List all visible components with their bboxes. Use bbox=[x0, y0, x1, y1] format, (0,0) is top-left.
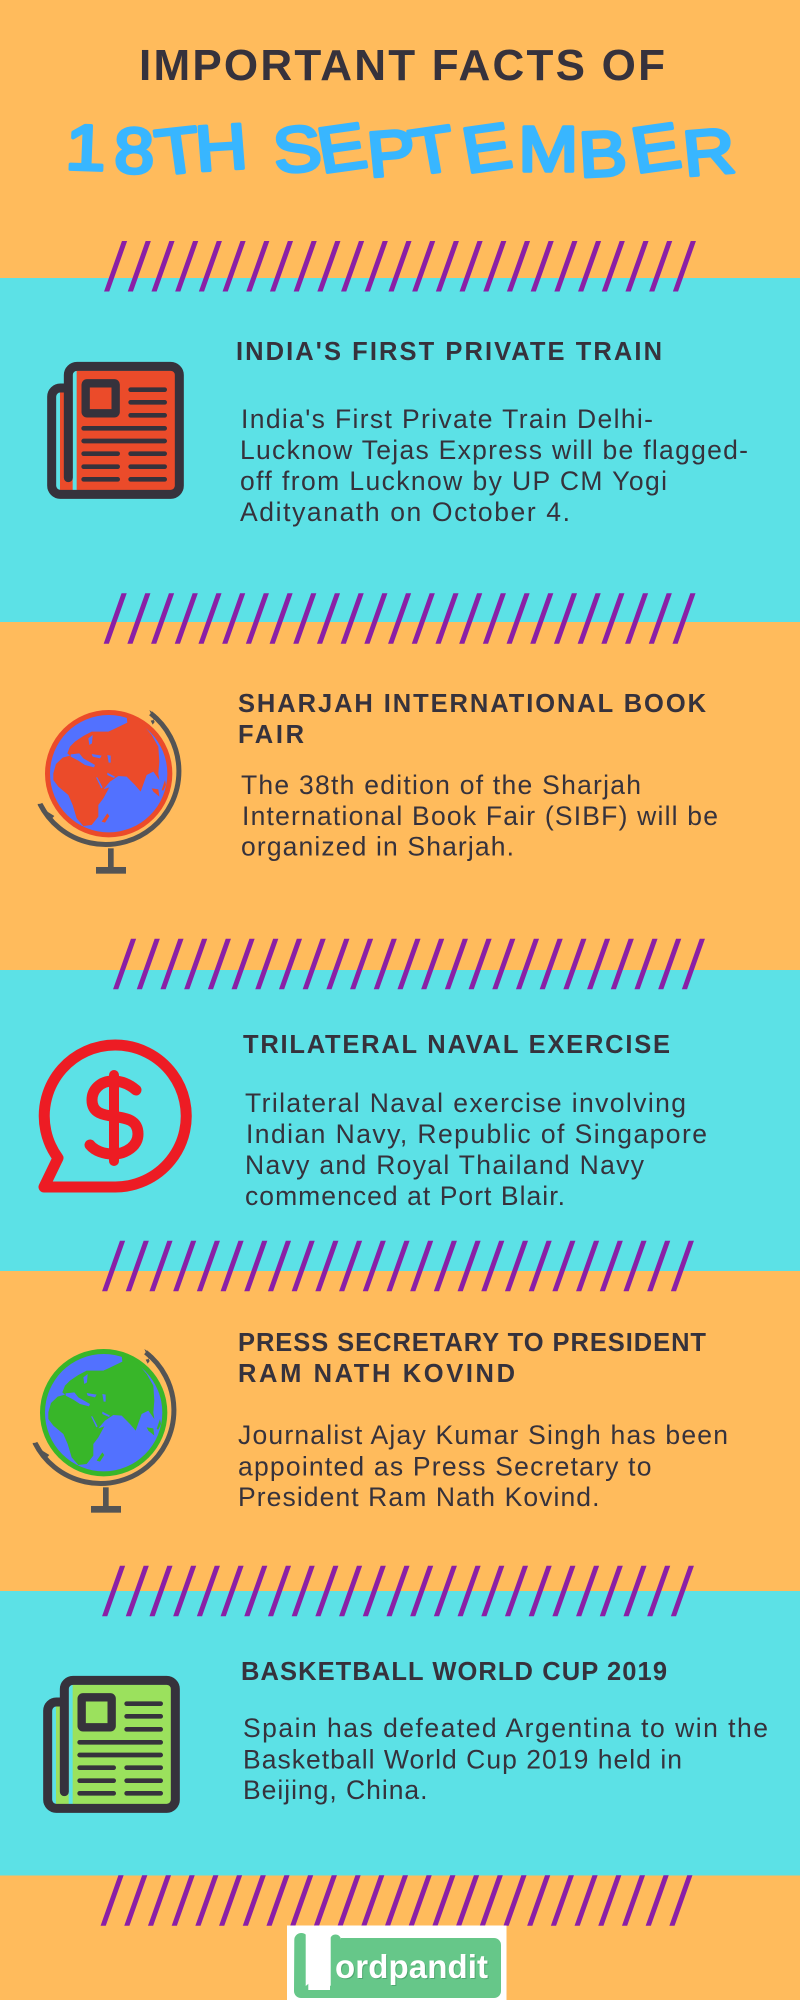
heading: PRESS SECRETARY TO PRESIDENT bbox=[238, 1329, 706, 1357]
icon: globe bbox=[37, 710, 179, 874]
heading: FAIR bbox=[238, 721, 304, 749]
icon: newspaper bbox=[48, 1680, 175, 1808]
body text: International Book Fair (SIBF) will be bbox=[242, 801, 718, 831]
body text: Navy and Royal Thailand Navy bbox=[245, 1150, 645, 1180]
body text bbox=[238, 1420, 728, 1512]
icon: globe bbox=[32, 1349, 174, 1513]
body text: Indian Navy, Republic of Singapore bbox=[246, 1119, 707, 1149]
icon: newspaper bbox=[52, 366, 179, 494]
body text: commenced at Port Blair. bbox=[245, 1181, 565, 1211]
panel: Press Secretary to President bbox=[32, 1329, 728, 1513]
body text: Basketball World Cup 2019 held in bbox=[243, 1744, 682, 1774]
panel: Basketball World Cup 2019 bbox=[0, 1591, 800, 1876]
body text: Spain has defeated Argentina to win the bbox=[243, 1713, 768, 1743]
logo: Wordpandit bbox=[287, 1926, 506, 2000]
body text: Beijing, China. bbox=[243, 1775, 428, 1805]
body text bbox=[240, 404, 748, 527]
heading: INDIA'S FIRST PRIVATE TRAIN bbox=[236, 338, 662, 366]
band bbox=[0, 1591, 800, 1876]
logo: Wordpandit: ordpandit bbox=[335, 1948, 488, 1985]
body text: Trilateral Naval exercise involving bbox=[245, 1088, 686, 1118]
body text: Adityanath on October 4. bbox=[240, 497, 570, 527]
stripe dividers bbox=[110, 266, 696, 1900]
body text: The 38th edition of the Sharjah bbox=[241, 770, 641, 800]
panel: Sharjah International Book Fair bbox=[37, 690, 718, 874]
panel: India's first private train bbox=[0, 278, 800, 622]
heading: BASKETBALL WORLD CUP 2019 bbox=[241, 1658, 667, 1686]
body text: Journalist Ajay Kumar Singh has been bbox=[238, 1420, 728, 1450]
date title: 18TH SEPTEMBER bbox=[64, 110, 738, 191]
body text: Lucknow Tejas Express will be flagged- bbox=[240, 435, 748, 465]
band bbox=[0, 278, 800, 622]
body text bbox=[243, 1713, 768, 1805]
body text bbox=[245, 1088, 707, 1211]
body text: appointed as Press Secretary to bbox=[238, 1452, 652, 1482]
title line: IMPORTANT FACTS OF bbox=[139, 41, 665, 90]
heading: TRILATERAL NAVAL EXERCISE bbox=[243, 1031, 670, 1059]
header bbox=[64, 41, 738, 191]
heading: RAM NATH KOVIND bbox=[238, 1360, 515, 1388]
body text: India's First Private Train Delhi- bbox=[241, 404, 653, 434]
heading: SHARJAH INTERNATIONAL BOOK bbox=[238, 690, 707, 718]
panel: Trilateral Naval Exercise bbox=[0, 970, 800, 1271]
band bbox=[0, 970, 800, 1271]
icon: dollar speech bubble bbox=[44, 1045, 186, 1187]
body text: off from Lucknow by UP CM Yogi bbox=[240, 466, 667, 496]
heading bbox=[238, 690, 707, 749]
body text bbox=[241, 770, 718, 862]
body text: organized in Sharjah. bbox=[241, 832, 514, 862]
body text: President Ram Nath Kovind. bbox=[238, 1482, 600, 1512]
heading bbox=[238, 1329, 706, 1388]
